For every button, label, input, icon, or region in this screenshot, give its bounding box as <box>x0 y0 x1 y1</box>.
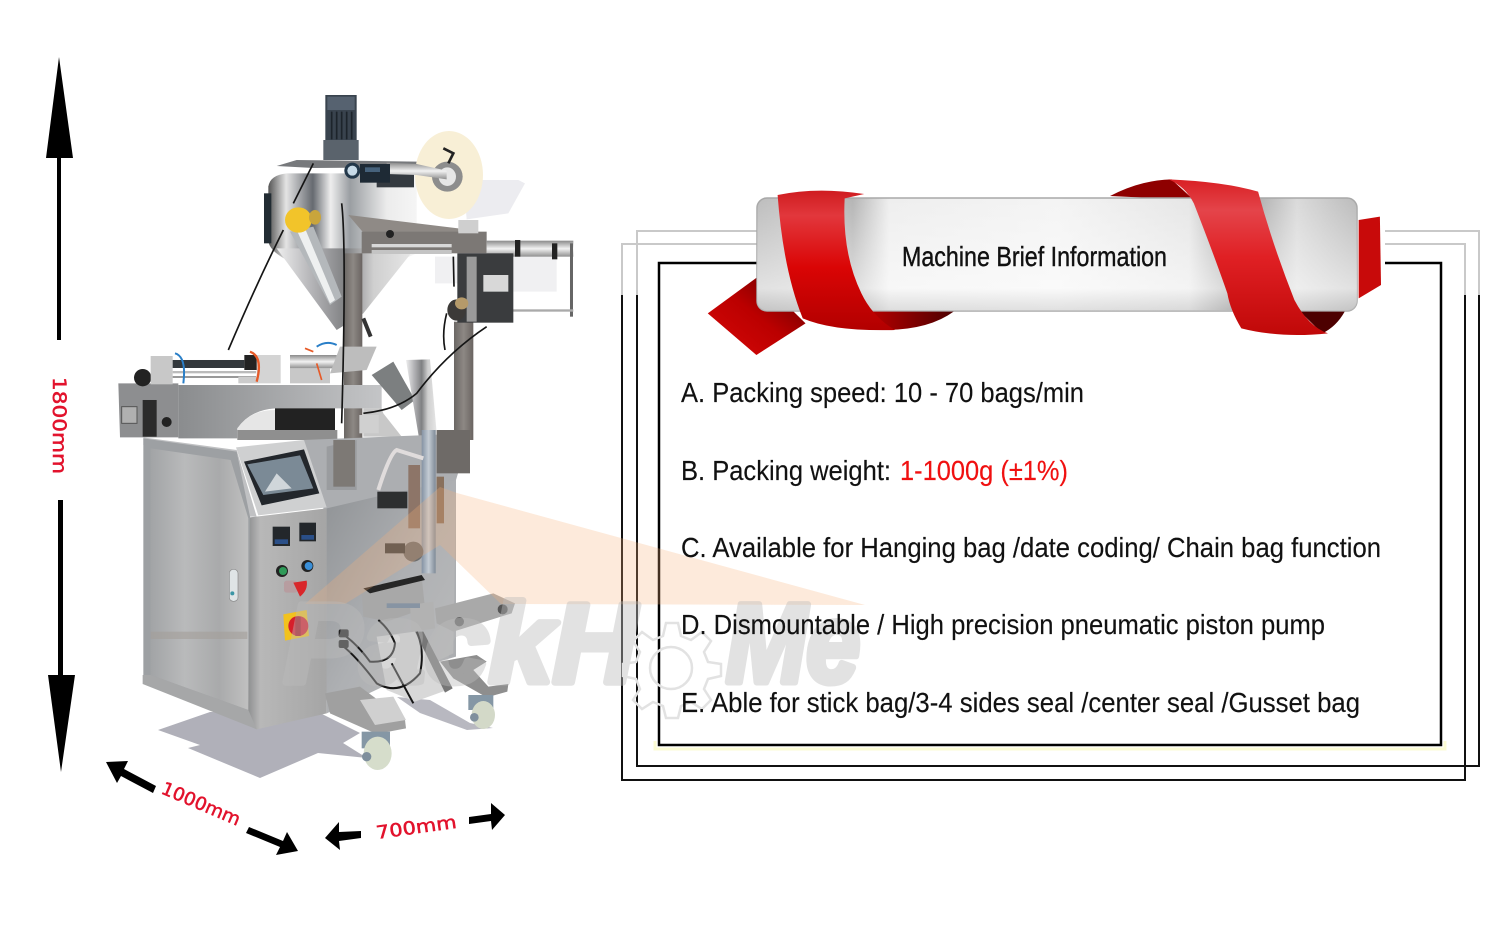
spec C: C. Available for Hanging bag /date coding/ Chain bag function <box>681 532 1381 563</box>
arrow: width right <box>469 803 505 830</box>
arrow: depth back <box>106 761 156 793</box>
watermark: roof <box>305 487 865 605</box>
spec A: A. Packing speed: 10 - 70 bags/min <box>681 377 1084 408</box>
label: 1800mm: 1800mm <box>48 377 70 474</box>
discharge chute <box>377 632 452 702</box>
cabinet door side <box>143 438 250 717</box>
watermark: gear <box>623 623 721 718</box>
buttons <box>276 560 313 597</box>
diagonal brace <box>348 215 458 233</box>
hopper lid <box>277 160 417 168</box>
spec B: 1-1000g (±1%) <box>900 455 1068 486</box>
spec D: D. Dismountable / High precision pneumatic piston pump <box>681 609 1325 640</box>
spec B <box>681 455 1068 486</box>
ribbon: back parts <box>708 179 1381 355</box>
shaft <box>387 163 447 179</box>
upright post <box>344 253 362 440</box>
feed tube <box>290 227 342 305</box>
banner card <box>757 198 1357 311</box>
power switch <box>283 610 309 641</box>
yellow cap <box>285 207 312 233</box>
banner title: Machine Brief Information <box>902 241 1167 272</box>
console slanted panel with touch screen <box>236 440 327 515</box>
title ribbon banner <box>708 179 1381 355</box>
sealing jaws <box>362 575 515 632</box>
rollers <box>477 240 573 317</box>
label: 700mm: 700mm <box>375 812 458 844</box>
motor <box>323 95 359 160</box>
forming tube and bag former <box>333 430 470 573</box>
hopper bowl <box>268 173 417 260</box>
film drive unit <box>447 253 513 323</box>
machine lower section <box>143 430 515 770</box>
film sheet <box>435 257 557 292</box>
cabinet back side <box>303 433 470 693</box>
controls on table <box>122 369 172 437</box>
film roll <box>415 131 483 219</box>
cabinet base <box>143 675 257 729</box>
cross member <box>362 230 487 254</box>
right post <box>454 322 473 440</box>
film stream <box>463 180 525 219</box>
arrow: width left <box>325 822 361 850</box>
watermark logo <box>284 487 865 718</box>
arrow: height down <box>48 500 75 772</box>
spec B: B. Packing weight: <box>681 455 891 486</box>
right foot and caster <box>440 655 508 729</box>
watermark: wordmark end: Me <box>726 581 860 706</box>
arrow: depth front <box>246 827 298 855</box>
hopper cone <box>277 248 415 330</box>
arrow: height up <box>46 57 73 340</box>
machine illustration <box>118 95 573 770</box>
piston pump <box>151 343 377 384</box>
panel: brief information frames <box>622 231 1479 780</box>
gauge <box>344 163 390 183</box>
shadow under machine <box>158 712 367 778</box>
power cables <box>342 620 422 703</box>
cables <box>228 163 487 423</box>
spec E: E. Able for stick bag/3-4 sides seal /center seal /Gusset bag <box>681 687 1360 718</box>
machine upper section <box>118 95 573 440</box>
watermark: wordmark: PackH <box>284 581 638 706</box>
temperature controllers <box>273 523 316 546</box>
left foot and caster <box>325 687 406 770</box>
console front <box>248 508 327 729</box>
cabinet top edge <box>143 437 257 517</box>
spec list <box>681 377 1381 718</box>
ribbon: front bands <box>778 179 1345 335</box>
table top <box>118 383 178 437</box>
label: 1000mm: 1000mm <box>158 778 244 830</box>
product funnel <box>372 359 437 440</box>
